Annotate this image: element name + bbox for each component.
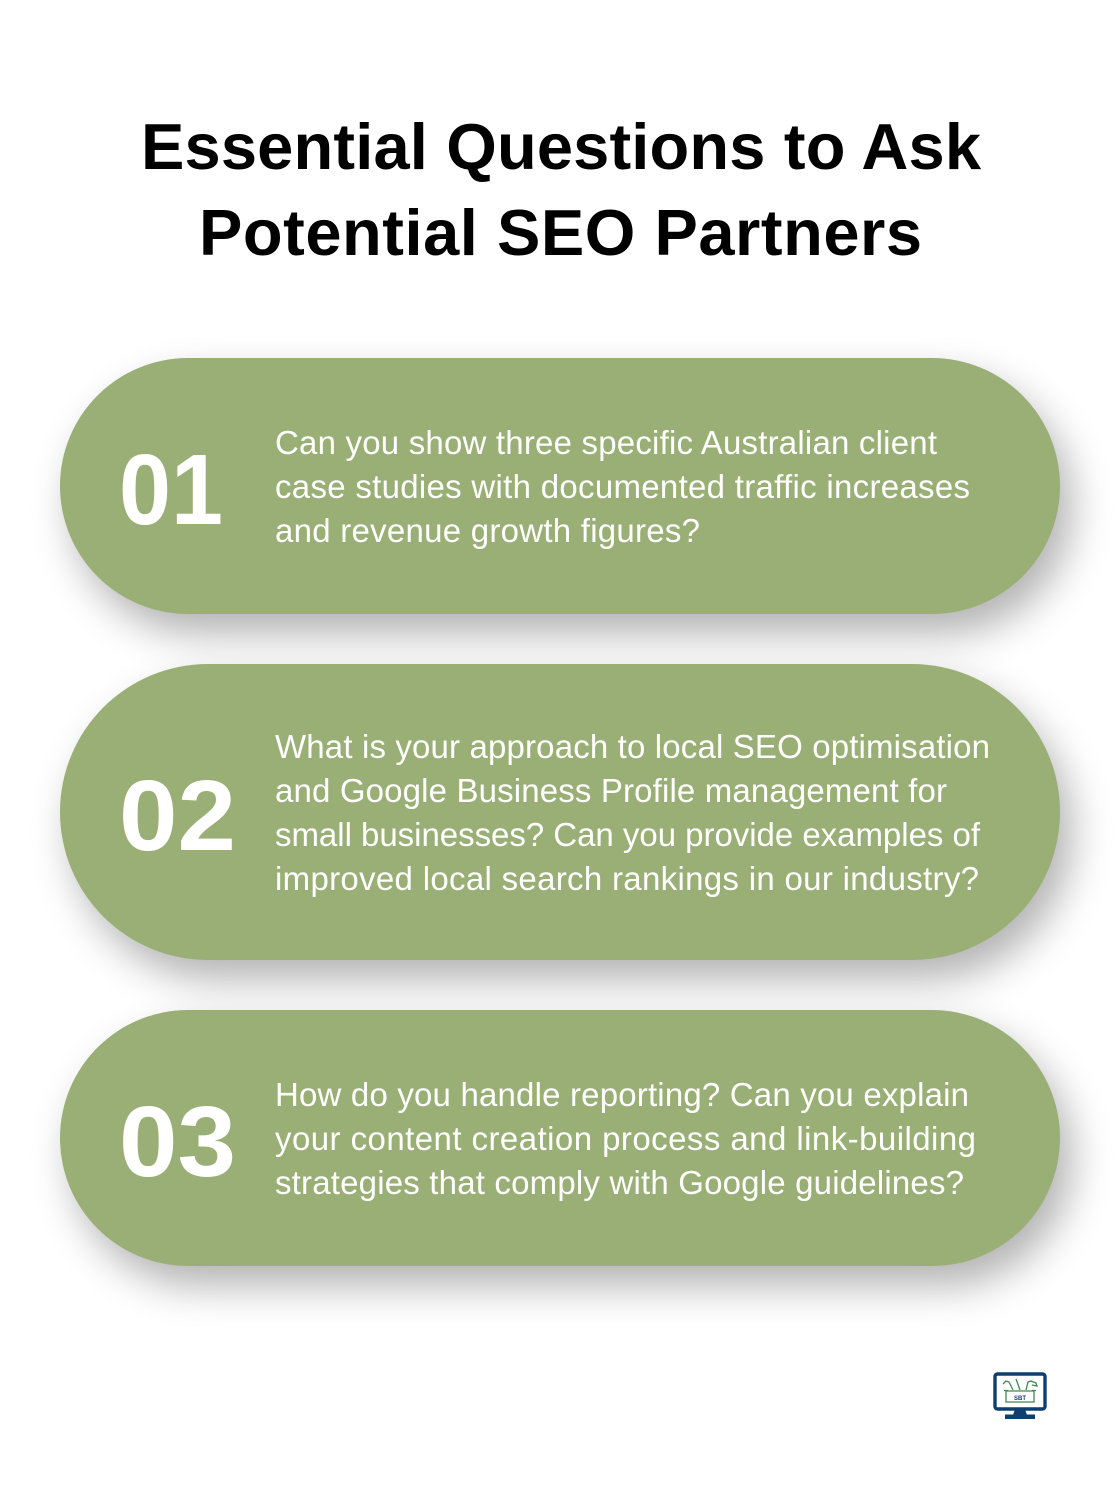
- question 02 text: What is your approach to local SEO optimisation: [275, 728, 990, 765]
- question 01 text: and revenue growth figures?: [275, 512, 700, 549]
- question 01 text: [275, 424, 970, 549]
- question 03 text: [275, 1076, 976, 1201]
- panel: question 03: [60, 1010, 1060, 1266]
- question 03 text: strategies that comply with Google guidelines?: [275, 1164, 964, 1201]
- title: Essential Questions to Ask: [141, 110, 982, 183]
- question 02 text: [275, 728, 990, 897]
- question 01 text: case studies with documented traffic increases: [275, 468, 970, 505]
- icon: monitor with toolbox logo: SBT: [1014, 1396, 1026, 1402]
- panel: question 01: [60, 358, 1060, 614]
- question 02 text: improved local search rankings in our industry?: [275, 860, 979, 897]
- title: Potential SEO Partners: [199, 196, 922, 269]
- question 03 text: How do you handle reporting? Can you explain: [275, 1076, 969, 1113]
- number 03: 03: [119, 1086, 236, 1198]
- number 01: 01: [119, 434, 223, 546]
- number 02: 02: [119, 760, 236, 872]
- question 03 text: your content creation process and link-building: [275, 1120, 976, 1157]
- title: [141, 110, 982, 269]
- icon: monitor with toolbox logo: [993, 1372, 1047, 1419]
- question 02 text: and Google Business Profile management for: [275, 772, 947, 809]
- question 01 text: Can you show three specific Australian client: [275, 424, 937, 461]
- panel: question 02: [60, 664, 1060, 960]
- question 02 text: small businesses? Can you provide examples of: [275, 816, 981, 853]
